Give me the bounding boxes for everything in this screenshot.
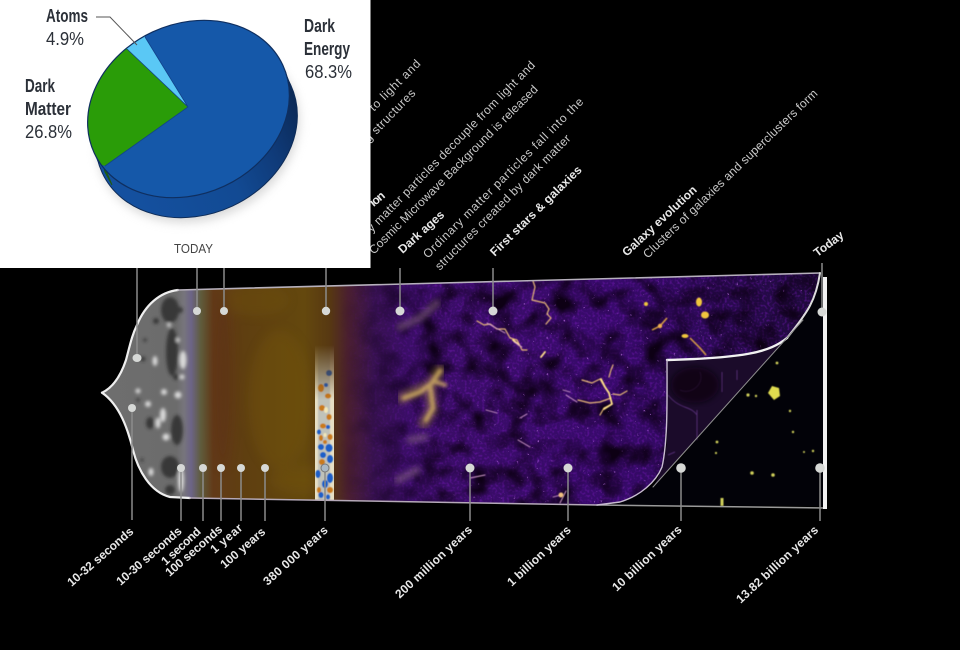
bottom time labels: 380 000 years	[260, 523, 331, 588]
bottom time labels: 200 million years	[392, 522, 475, 601]
curled back of page	[653, 338, 787, 487]
dark energy region beyond the curled page	[714, 360, 815, 506]
top era labels	[361, 57, 847, 273]
bottom time labels: 1 billion years	[504, 523, 574, 589]
bright filaments	[470, 281, 627, 503]
top era labels: to light and	[366, 57, 423, 114]
label: atoms	[46, 6, 88, 49]
panel: pie chart inset	[0, 0, 370, 268]
pie top face	[58, 0, 319, 230]
top era labels: Cosmic Microwave Background is released	[366, 82, 541, 257]
top era labels: Clusters of galaxies and superclusters form	[640, 86, 820, 261]
label: atoms: 4.9%	[46, 29, 84, 49]
top era labels: y matter particles decouple from light and	[364, 58, 538, 235]
timeline markers	[132, 263, 822, 521]
pie shadow	[67, 11, 329, 255]
bottom time labels: 10 billion years	[609, 522, 685, 594]
top era labels: ion	[367, 188, 388, 209]
top era labels: Dark ages	[395, 207, 447, 256]
label: atoms: Atoms	[46, 6, 88, 26]
atoms leader line	[96, 17, 137, 45]
chart: expanding universe timeline shape	[100, 265, 830, 510]
label: dark matter: Matter	[25, 99, 71, 119]
marker dots	[128, 306, 826, 473]
top era labels: Galaxy evolution	[619, 183, 700, 259]
bottom time labels: 100 seconds	[162, 522, 225, 579]
label: dark matter: Dark	[25, 76, 56, 96]
top era labels: structures created by dark matter	[432, 132, 573, 273]
yellow clusters	[558, 298, 709, 498]
bottom time labels: 1 year	[207, 521, 246, 556]
slice: atoms	[127, 36, 186, 104]
label: dark matter: 26.8%	[25, 122, 72, 142]
right edge bar	[823, 277, 827, 509]
bottom time labels: 100 years	[217, 524, 268, 571]
label: today: TODAY	[174, 241, 213, 256]
turbulent brown haze	[213, 284, 330, 494]
blurry early web	[398, 303, 445, 480]
slice: dark matter	[88, 49, 188, 166]
bottom time labels: 13.82 billion years	[733, 523, 821, 606]
top era labels: g structures	[361, 86, 418, 145]
cosmic microwave background strip	[315, 345, 334, 502]
label: dark matter	[25, 76, 72, 142]
label: dark energy	[304, 16, 352, 82]
label: dark energy: 68.3%	[305, 62, 352, 82]
pie side	[60, 0, 327, 250]
top era labels: Today	[811, 228, 847, 260]
top era labels: Ordinary matter particles fall into the	[420, 95, 586, 261]
top era labels: First stars & galaxies	[487, 163, 585, 259]
label: dark energy: Energy	[304, 39, 350, 59]
pie chart	[87, 20, 298, 218]
bottom time labels: 1 second	[158, 524, 204, 568]
gray inflation bubbles	[136, 297, 186, 495]
label: dark energy: Dark	[304, 16, 336, 36]
bottom time labels: 10-32 seconds	[64, 524, 136, 589]
bottom time labels: 10-30 seconds	[113, 524, 185, 588]
bottom time labels	[64, 521, 821, 606]
page: eras of the universe	[100, 265, 830, 510]
cosmic web texture	[356, 274, 818, 504]
outline of the universe shape	[102, 273, 826, 508]
